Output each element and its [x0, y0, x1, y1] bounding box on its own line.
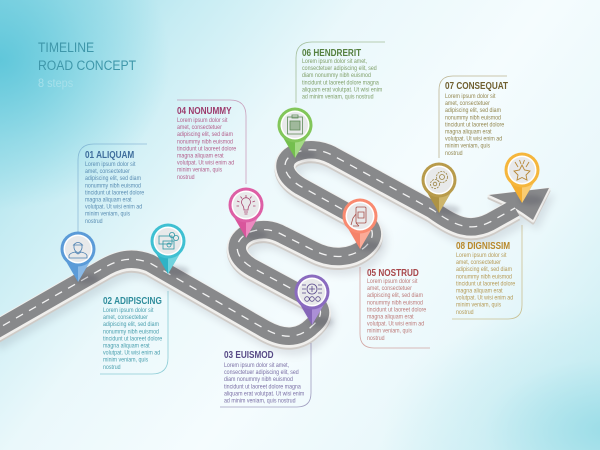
pin 05: phone in hand icon: [342, 198, 381, 251]
step 02 text block: [100, 291, 168, 374]
step 08 text block: volutpat. Ut wisi enim ad: [456, 295, 513, 302]
step 03 text block: [220, 343, 311, 407]
pin 08: star icon: [504, 152, 543, 205]
step 01 text block: nonummy nibh euismod: [85, 183, 141, 189]
step 08 text block: amet, consectetuer: [456, 260, 501, 266]
title: [38, 39, 136, 90]
pin 02: money icon: [150, 224, 189, 276]
step 01 text block: adipiscing elit, sed diam: [85, 176, 141, 182]
step 05 text block: [360, 267, 430, 348]
step 06 text block: tincidunt ut laoreet dolore magna: [302, 80, 380, 86]
step 01 text block: tincidunt ut laoreet dolore: [85, 190, 144, 197]
step 02 text block: amet, consectetuer: [103, 315, 148, 321]
step 08 text block: [452, 225, 522, 319]
title: 8 steps: [38, 78, 74, 90]
step 03 text block: 03 EUISMOD: [224, 349, 274, 360]
step 06 text block: diam nonummy nibh euismod: [302, 73, 371, 79]
step 07 text block: adipiscing elit, sed diam: [445, 108, 501, 114]
step 06 text block: Lorem ipsum dolor sit amet,: [302, 59, 367, 65]
step 02 text block: tincidunt ut laoreet dolore: [103, 336, 162, 343]
step 08 text block: nonummy nibh euismod: [456, 274, 512, 280]
step 07 text block: minim veniam, quis: [445, 143, 490, 150]
step 06 text block: consectetuer adipiscing elit, sed: [302, 66, 377, 72]
step 01 text block: minim veniam, quis: [85, 211, 130, 218]
step 02 text block: nonummy nibh euismod: [103, 329, 159, 335]
step 05 text block: magna aliquam erat: [367, 314, 414, 321]
step 03 text block: ad minim veniam, quis nostrud: [224, 398, 296, 405]
step 01 text block: nostrud: [85, 218, 103, 225]
step 01 text block: amet, consectetuer: [85, 169, 130, 175]
step 08 text block: minim veniam, quis: [456, 302, 501, 309]
step 03 text block: tincidunt ut laoreet dolore magna: [224, 384, 302, 390]
step 05 text block: tincidunt ut laoreet dolore: [367, 307, 426, 314]
step 06 text block: aliquam erat volutpat. Ut wisi enim: [302, 87, 382, 94]
step 02 text block: adipiscing elit, sed diam: [103, 322, 159, 328]
step 07 text block: [439, 76, 508, 158]
step 02 text block: magna aliquam erat: [103, 343, 150, 350]
step 04 text block: nostrud: [177, 174, 195, 181]
step 01 text block: [78, 144, 147, 232]
step 03 text block: aliquam erat volutpat. Ut wisi enim: [224, 391, 304, 398]
step 02 text block: minim veniam, quis: [103, 357, 148, 364]
pin 07: gears icon: [422, 162, 460, 215]
step 02 text block: 02 ADIPISCING: [103, 295, 162, 306]
icon: driver: [69, 242, 87, 258]
step 07 text block: magna aliquam erat: [445, 129, 492, 136]
step 02 text block: volutpat. Ut wisi enim ad: [103, 350, 160, 357]
step 04 text block: tincidunt ut laoreet dolore: [177, 146, 236, 153]
step 07 text block: amet, consectetuer: [445, 101, 490, 107]
icon: banknote and gears: [159, 232, 179, 249]
step 01 text block: 01 ALIQUAM: [85, 149, 134, 160]
step 08 text block: Lorem ipsum dolor sit: [456, 253, 507, 259]
step 07 text block: tincidunt ut laoreet dolore: [445, 122, 504, 129]
pin 04: light bulb icon: [228, 188, 267, 240]
title: TIMELINE: [38, 39, 94, 55]
icon: phone in hand: [351, 207, 366, 226]
step 02 text block: Lorem ipsum dolor sit: [103, 308, 154, 314]
icon: clipboard: [288, 115, 302, 134]
pin 01: person icon: [60, 232, 99, 284]
icon: medical cross and gears: [302, 284, 322, 301]
step 03 text block: diam nonummy nibh euismod: [224, 377, 293, 383]
pin 03: medical gears icon: [294, 274, 333, 327]
step 01 text block: volutpat. Ut wisi enim ad: [85, 204, 142, 211]
step 04 text block: volutpat. Ut wisi enim ad: [177, 160, 234, 167]
step 07 text block: 07 CONSEQUAT: [445, 80, 508, 91]
step 05 text block: adipiscing elit, sed diam: [367, 293, 423, 299]
icon: gears: [430, 172, 448, 188]
title: ROAD CONCEPT: [38, 57, 136, 73]
step 08 text block: nostrud: [456, 309, 474, 316]
step 06 text block: 06 HENDRERIT: [302, 47, 361, 58]
pin 06: clipboard icon: [278, 108, 316, 160]
step 07 text block: nostrud: [445, 150, 463, 157]
step 02 text block: nostrud: [103, 364, 121, 371]
step 08 text block: magna aliquam erat: [456, 288, 503, 295]
step 04 text block: adipiscing elit, sed diam: [177, 132, 233, 138]
step 05 text block: amet, consectetuer: [367, 286, 412, 292]
step 05 text block: minim veniam, quis: [367, 328, 412, 335]
step 04 text block: amet, consectetuer: [177, 125, 222, 131]
step 03 text block: Lorem ipsum dolor sit amet,: [224, 363, 289, 369]
step 04 text block: nonummy nibh euismod: [177, 139, 233, 145]
step 05 text block: Lorem ipsum dolor sit: [367, 279, 418, 285]
step 04 text block: Lorem ipsum dolor sit: [177, 118, 228, 124]
step 06 text block: ad minim veniam, quis nostrud: [302, 94, 374, 101]
step 04 text block: [177, 100, 246, 184]
step 05 text block: nonummy nibh euismod: [367, 300, 423, 306]
step 07 text block: Lorem ipsum dolor sit: [445, 94, 496, 100]
winding road with arrow: [0, 150, 553, 344]
step 04 text block: 04 NONUMMY: [177, 105, 232, 116]
step 05 text block: volutpat. Ut wisi enim ad: [367, 321, 424, 328]
step 01 text block: Lorem ipsum dolor sit: [85, 162, 136, 168]
step 04 text block: minim veniam, quis: [177, 167, 222, 174]
step 03 text block: consectetuer adipiscing elit, sed: [224, 370, 299, 376]
step 07 text block: nonummy nibh euismod: [445, 115, 501, 121]
step 08 text block: adipiscing elit, sed diam: [456, 267, 512, 273]
step 06 text block: [296, 42, 385, 103]
step 05 text block: 05 NOSTRUD: [367, 267, 419, 278]
icon: star with rays: [514, 160, 530, 180]
icon: light bulb: [236, 195, 256, 214]
step 07 text block: volutpat. Ut wisi enim ad: [445, 136, 502, 143]
step 04 text block: magna aliquam erat: [177, 153, 224, 160]
step 05 text block: nostrud: [367, 335, 385, 342]
step 01 text block: magna aliquam erat: [85, 197, 132, 204]
step 08 text block: 08 DIGNISSIM: [456, 240, 510, 251]
step 08 text block: tincidunt ut laoreet dolore: [456, 281, 515, 288]
